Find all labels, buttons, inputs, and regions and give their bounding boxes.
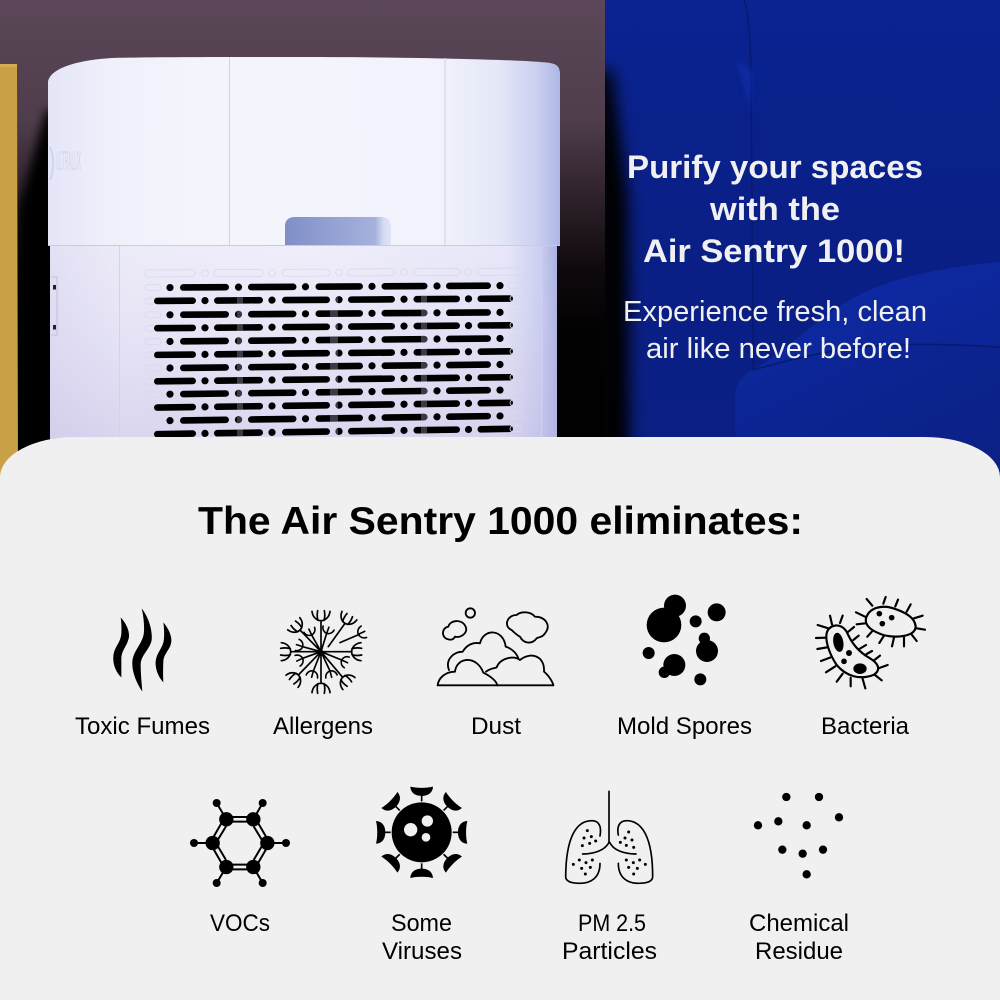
gold frame (0, 64, 18, 480)
subheading (623, 296, 927, 365)
purifier body (50, 245, 557, 480)
label: some viruses (382, 910, 462, 965)
icon: allergens (281, 611, 367, 693)
heading: eliminates: The Air Sentry 1000 eliminates: (198, 500, 803, 543)
icon: mold spores (643, 595, 726, 685)
blue sofa back seam (736, 0, 753, 370)
blue sofa seat (735, 344, 1000, 480)
purifier lid (48, 57, 560, 246)
headline: purify your spaces: Air Sentry 1000! (643, 233, 905, 269)
label: chemical residue: Residue (755, 938, 843, 965)
label: vocs: VOCs (210, 910, 270, 937)
icon: toxic fumes (113, 608, 171, 692)
icon: some viruses (376, 787, 467, 878)
label: toxic fumes: Toxic Fumes (75, 713, 210, 740)
subheading: Experience fresh, clean (623, 296, 927, 328)
brand mark (50, 145, 81, 180)
subheading: air like never before! (646, 333, 911, 365)
body shading (50, 245, 557, 480)
panel: eliminates (0, 437, 1000, 1000)
icon: vocs (190, 799, 290, 887)
air purifier (48, 57, 560, 480)
shadow behind purifier (18, 105, 50, 302)
label: pm 2.5 particles (562, 910, 657, 965)
label: bacteria: Bacteria (821, 713, 910, 740)
air purifier: ULTRALUX (56, 145, 81, 176)
label: chemical residue (749, 910, 849, 965)
icon: chemical residue (754, 793, 843, 878)
vent grille (145, 268, 522, 441)
headline: purify your spaces: Purify your spaces (627, 149, 923, 185)
carry handle (285, 217, 391, 245)
label: some viruses: Viruses (382, 938, 462, 965)
background photo (0, 0, 1000, 480)
headline: purify your spaces (627, 149, 923, 269)
blue sofa arm (753, 262, 1000, 370)
headline: purify your spaces: with the (709, 191, 840, 227)
sofa seam (753, 344, 1000, 370)
label: chemical residue: Chemical (749, 910, 849, 937)
label: pm 2.5 particles: Particles (562, 938, 657, 965)
label: allergens: Allergens (273, 713, 373, 740)
icon: pm 2.5 lungs (566, 791, 653, 883)
label: mold spores: Mold Spores (617, 713, 752, 740)
label: dust: Dust (471, 713, 521, 740)
label: pm 2.5 particles: PM 2.5 (578, 910, 646, 937)
shadow beside the sofa (595, 70, 630, 480)
purifier lid seams (230, 57, 445, 246)
icon: bacteria (816, 597, 925, 688)
side controls (51, 277, 57, 335)
icon: dust (438, 608, 553, 685)
label: some viruses: Some (391, 910, 452, 937)
